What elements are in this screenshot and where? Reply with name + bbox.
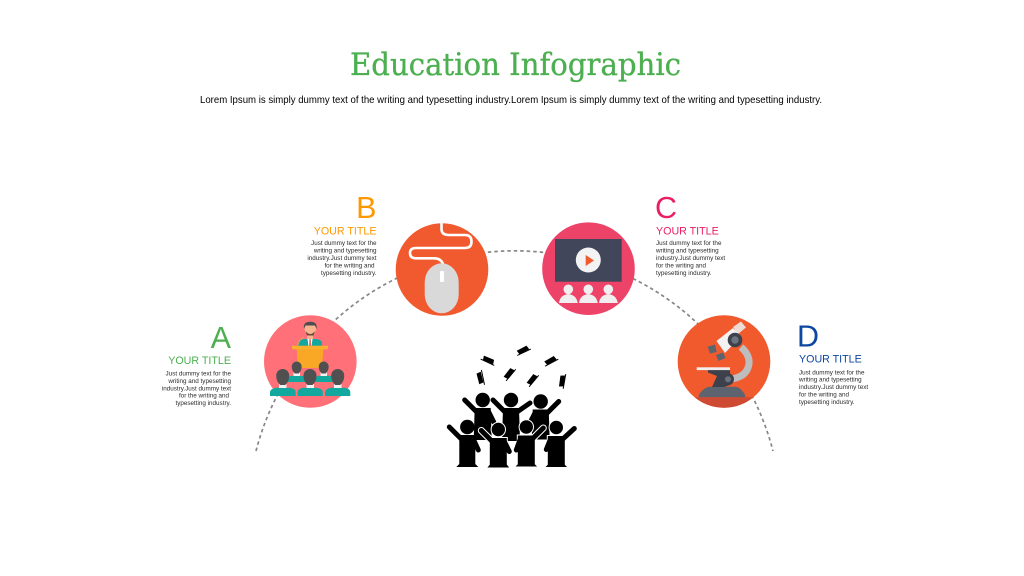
text block B: YOUR TITLE xyxy=(314,225,376,237)
text block A: YOUR TITLE xyxy=(168,355,231,367)
text block A: industry.Just dummy text xyxy=(162,385,231,392)
text block B: for the writing and xyxy=(324,262,375,270)
icon: microscope xyxy=(678,315,770,408)
text block B: typesetting industry. xyxy=(321,270,377,277)
text block B: industry.Just dummy text xyxy=(307,255,377,262)
text block A: for the writing and xyxy=(179,393,229,400)
text block C xyxy=(655,191,725,277)
text block B: Just dummy text for the xyxy=(311,240,377,247)
text block A: writing and typesetting xyxy=(167,378,231,385)
dashed arc xyxy=(256,251,773,451)
icon: computer mouse xyxy=(396,223,488,316)
text block C: for the writing and xyxy=(656,262,707,270)
text block C: typesetting industry. xyxy=(656,270,712,277)
text block C: C xyxy=(655,191,677,225)
text block C: Just dummy text for the xyxy=(656,240,722,247)
text block B: B xyxy=(356,191,376,225)
title: Education Infographic xyxy=(350,47,681,83)
text block D: YOUR TITLE xyxy=(799,354,862,366)
text block B: writing and typesetting xyxy=(313,248,377,254)
text block D: for the writing and xyxy=(799,392,850,398)
back row of people xyxy=(465,393,559,441)
icon: graduating crowd xyxy=(449,345,574,468)
text block D: industry.Just dummy text xyxy=(799,384,868,391)
text block A: Just dummy text for the xyxy=(166,370,231,378)
text block D xyxy=(797,320,868,406)
icon: speaker and audience xyxy=(264,315,357,408)
text block A: typesetting industry. xyxy=(175,400,231,407)
text block A: A xyxy=(211,321,232,355)
text block C: writing and typesetting xyxy=(655,248,719,254)
text block D: writing and typesetting xyxy=(798,377,862,384)
text block C: YOUR TITLE xyxy=(656,225,719,237)
icon: video presentation xyxy=(542,222,635,315)
text block C: industry.Just dummy text xyxy=(656,255,725,262)
graduation caps xyxy=(476,345,566,389)
text block D: D xyxy=(797,320,819,354)
text block D: typesetting industry. xyxy=(799,399,855,406)
text block A xyxy=(162,321,232,407)
text block D: Just dummy text for the xyxy=(799,369,865,376)
text block B xyxy=(307,191,377,277)
front row of people xyxy=(449,420,574,468)
subtitle: Lorem Ipsum is simply dummy text of the writing and typesetting industry.Lorem Ipsum is simply dummy text of the writing and typesetting industry. xyxy=(200,94,822,106)
